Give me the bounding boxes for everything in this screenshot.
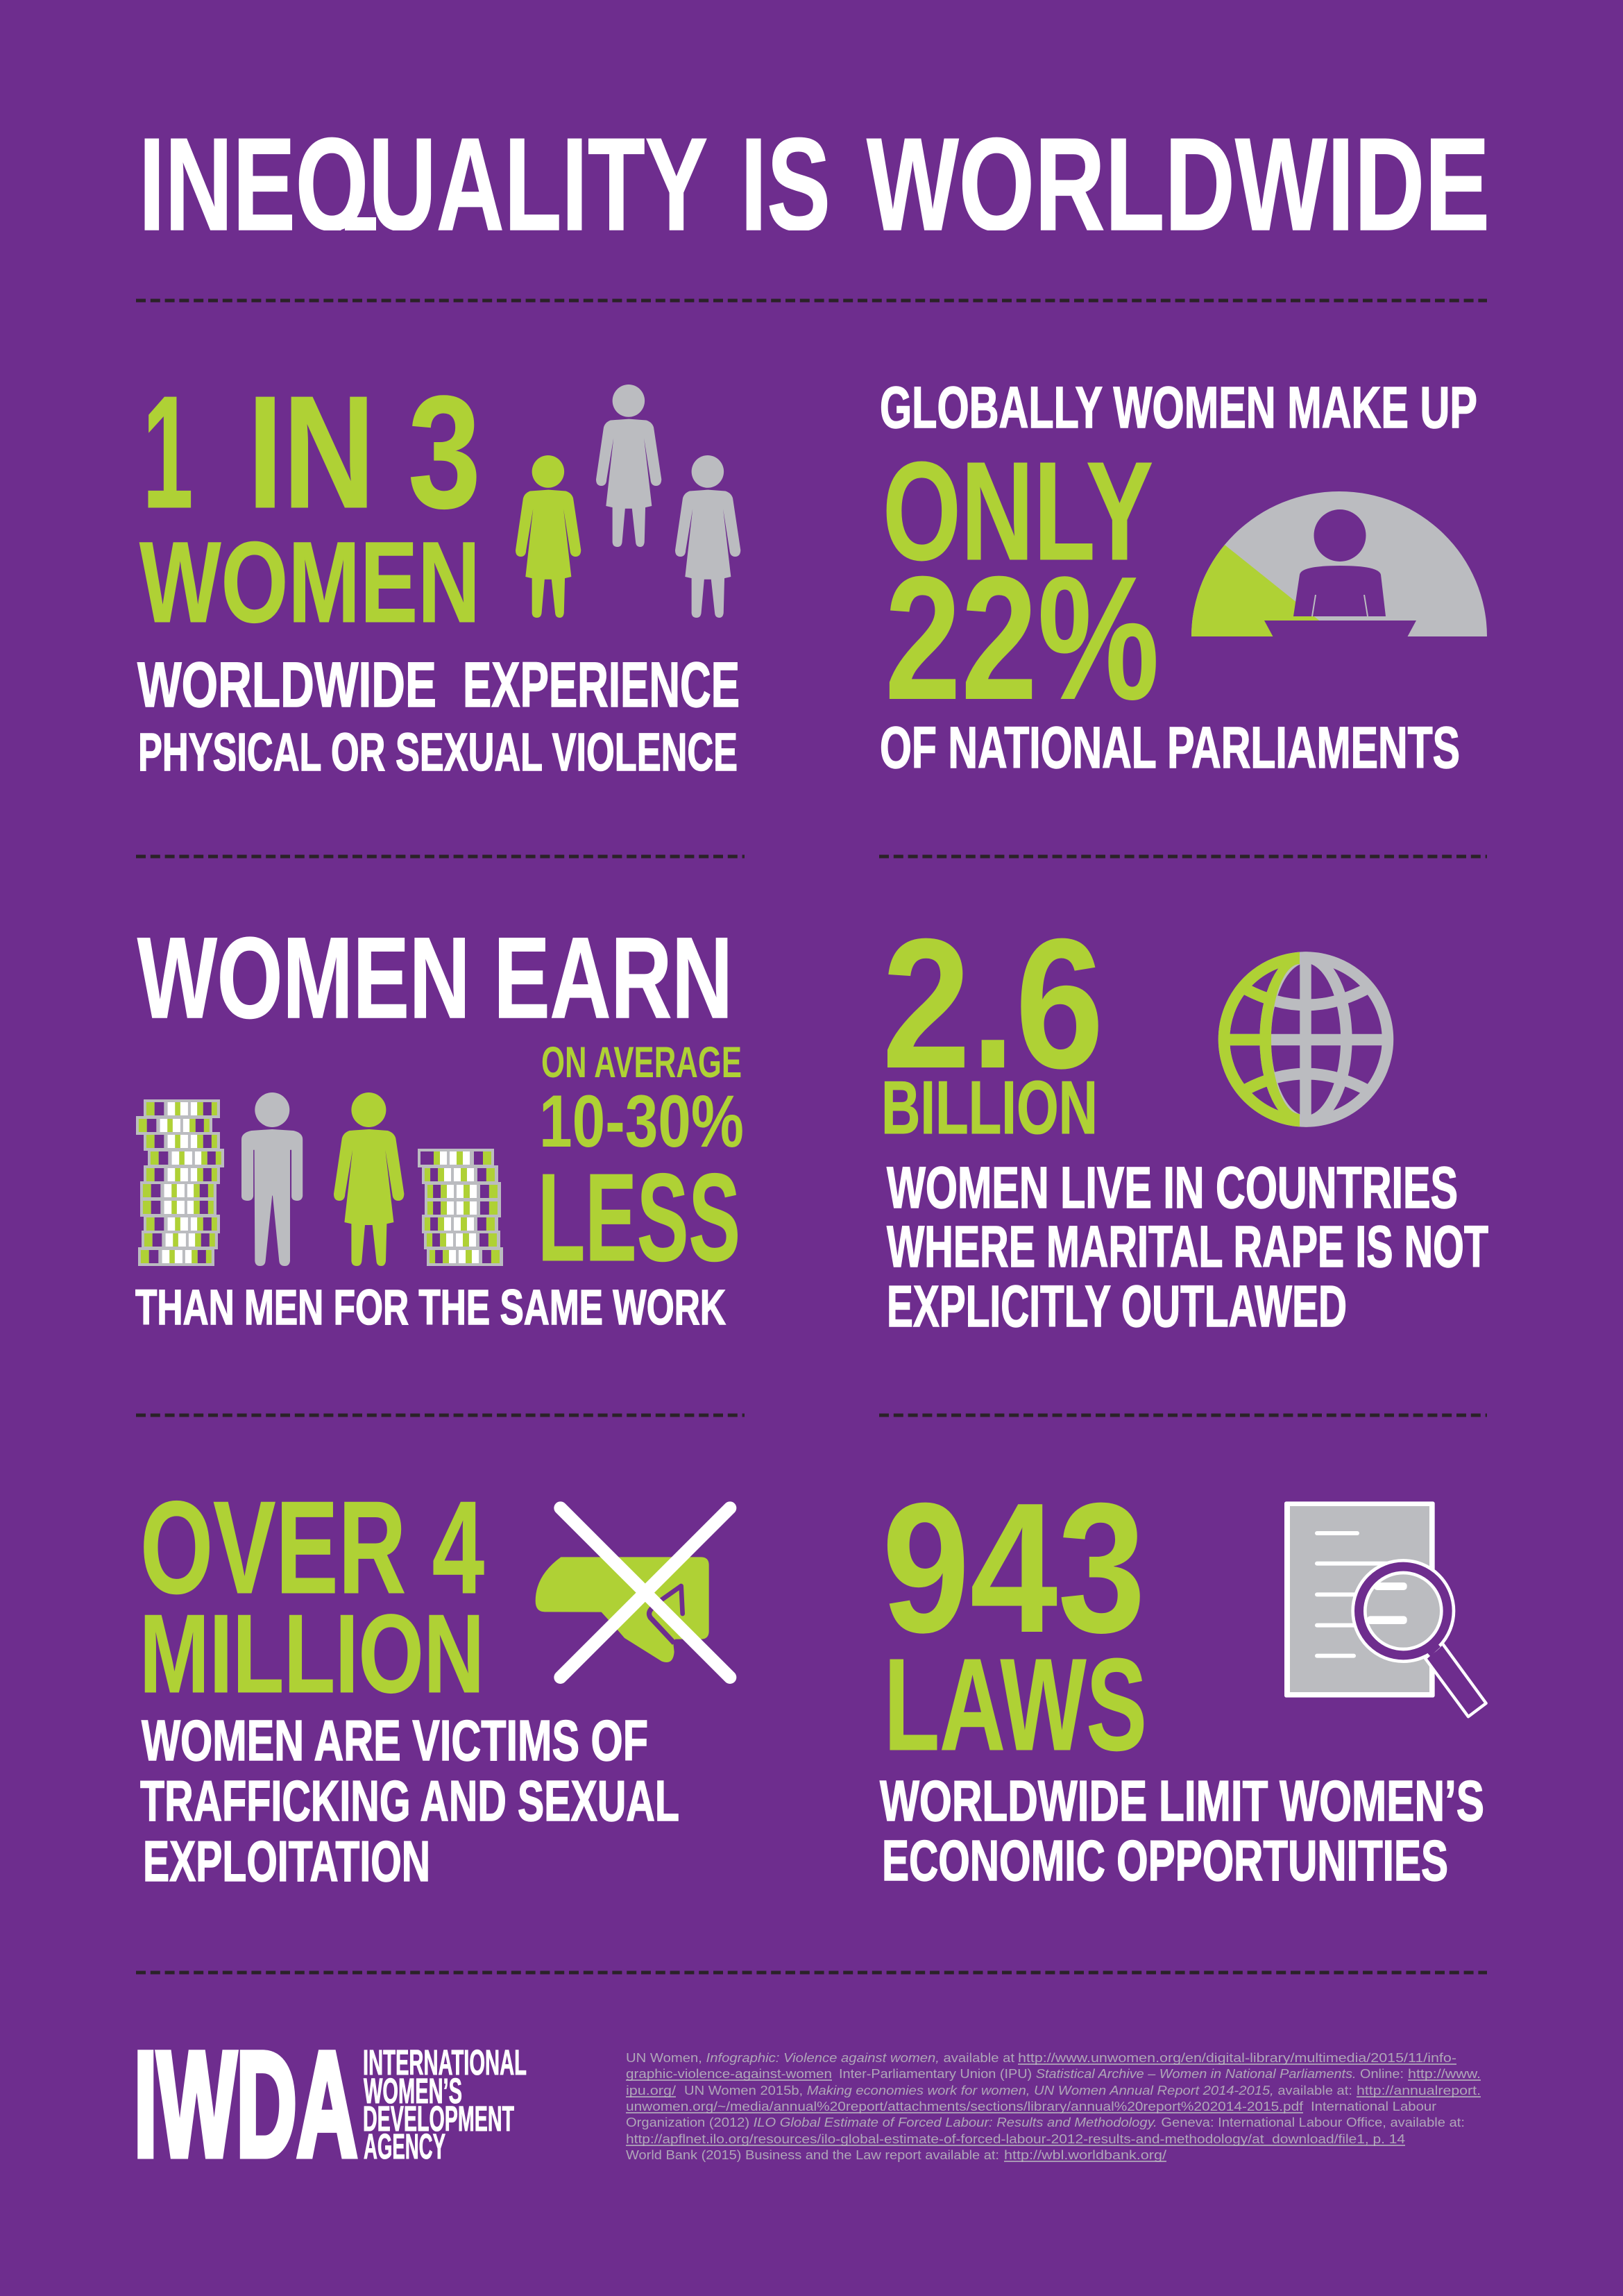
text: worldwide experience: WORLDWIDE [137, 650, 436, 720]
statistic: 1 in 3: IN [248, 362, 375, 541]
logo wordmark: WOMEN’S [364, 2071, 462, 2111]
references: http://apflnet.ilo.org/resources/ilo-global-estimate-of-forced-labour-2012-results-and-methodology/at_download/file1, p. 14 [626, 2132, 1405, 2147]
panel: 943 laws [880, 1464, 1486, 1893]
panel: parliaments [880, 375, 1487, 780]
references: ipu.org/ [626, 2084, 676, 2097]
panel: women earn [135, 914, 744, 1335]
heading: women earn: WOMEN EARN [137, 914, 733, 1043]
references [626, 2051, 1481, 2162]
statistic: laws: LAWS [884, 1632, 1147, 1778]
text: worldwide experience: EXPERIENCE [463, 650, 740, 720]
title: IS [740, 111, 831, 258]
panel: 1 in 3 women [137, 362, 740, 782]
references: UN Women 2015b, Making economies work for women, UN Women Annual Report 2014-2015, available at: [684, 2084, 1352, 2097]
text: trafficking and sexual: TRAFFICKING AND SEXUAL [140, 1769, 679, 1833]
title: INEQUALITY [139, 111, 708, 258]
logo: IWDA [134, 2021, 527, 2188]
text: physical or sexual violence: PHYSICAL OR SEXUAL VIOLENCE [138, 723, 738, 782]
references: International Labour [1311, 2100, 1436, 2113]
panel: over 4 million [139, 1474, 730, 1893]
references: http://wbl.worldbank.org/ [1004, 2148, 1166, 2162]
logo mark: IWDA [134, 2021, 357, 2188]
statistic: 943: 943 [882, 1464, 1146, 1671]
icon: globe [1224, 958, 1388, 1122]
statistic: over 4: OVER 4 [140, 1474, 484, 1621]
logo wordmark: AGENCY [364, 2127, 445, 2166]
references: UN Women, Infographic: Violence against women, available at [626, 2051, 1014, 2065]
icon: woman [334, 1092, 404, 1266]
statistic: only: ONLY [883, 432, 1153, 589]
references: graphic-violence-against-women [626, 2067, 832, 2081]
text: exploitation: EXPLOITATION [143, 1829, 430, 1893]
references: World Bank (2015) Business and the Law report available at: [626, 2148, 999, 2162]
references: http://www. [1408, 2067, 1481, 2081]
statistic: 1 in 3: 1 [143, 362, 193, 541]
logo wordmark [363, 2043, 527, 2166]
logo wordmark: DEVELOPMENT [363, 2099, 514, 2138]
panel: 2.6 billion [884, 938, 1488, 1328]
text: explicitly outlawed: EXPLICITLY OUTLAWED [887, 1274, 1347, 1339]
statistic: women: WOMEN [139, 518, 480, 647]
icon: shorter coin stack [418, 1149, 503, 1266]
references: Inter-Parliamentary Union (IPU) Statistical Archive – Women in National Parliaments. Online: [839, 2067, 1404, 2081]
statistic: million: MILLION [139, 1592, 484, 1716]
references: http://annualreport. [1357, 2084, 1481, 2097]
references: Organization (2012) ILO Global Estimate of Forced Labour: Results and Methodology. Geneva: International Labour Office, available at: [626, 2116, 1465, 2129]
icon: parliament chart with person at desk [1191, 491, 1487, 637]
statistic: 1 in 3: 3 [408, 362, 481, 541]
title [144, 137, 1486, 230]
icon: taller coin stack [136, 1099, 224, 1266]
statistic: 1 in 3 [143, 362, 481, 541]
statistic: billion: BILLION [881, 1065, 1098, 1150]
icon: document under magnifying glass [1284, 1501, 1486, 1716]
statistic: 2.6: 2.6 [882, 900, 1104, 1107]
references: unwomen.org/~/media/annual%20report/attachments/sections/library/annual%20report%202014-2015.pdf [626, 2100, 1304, 2113]
text: worldwide experience [137, 650, 740, 720]
icon: man [241, 1092, 303, 1266]
statistic: less: LESS [538, 1148, 740, 1288]
logo wordmark: INTERNATIONAL [363, 2043, 527, 2082]
statistic: 22 percent: 22% [885, 539, 1159, 736]
text: women are victims of: WOMEN ARE VICTIMS OF [142, 1708, 648, 1773]
icon: three women, one highlighted [516, 385, 740, 618]
text: on average: ON AVERAGE [541, 1038, 742, 1087]
text: than men for the same work: THAN MEN FOR THE SAME WORK [135, 1281, 726, 1335]
icon: crossed out gun [536, 1508, 730, 1678]
references: http://www.unwomen.org/en/digital-library/multimedia/2015/11/info- [1018, 2051, 1456, 2065]
statistic: 10-30 percent: 10-30% [539, 1079, 744, 1163]
